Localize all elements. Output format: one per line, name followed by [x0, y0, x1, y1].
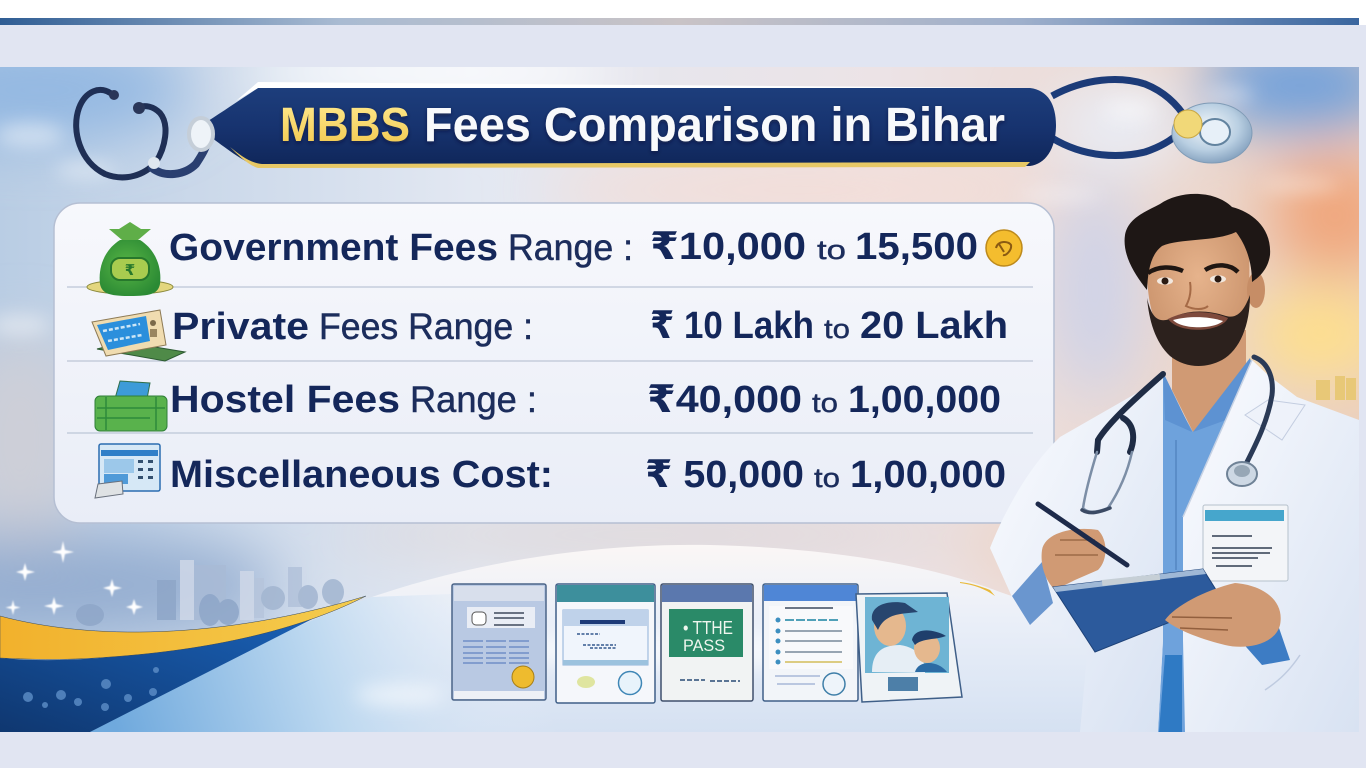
row: government fees: 15,500: [855, 226, 978, 268]
shirt collars: [1163, 372, 1192, 432]
card 3: pass: • TTHE: [683, 618, 733, 638]
blue swoosh: [0, 614, 322, 732]
panel: fee comparison table: [54, 203, 1054, 523]
icon: stethoscope ring: [189, 118, 213, 150]
card 5: photo id: [856, 593, 962, 702]
row: miscellaneous cost: ₹ 50,000: [645, 454, 804, 496]
document cards: [452, 584, 962, 703]
id badge: [1203, 505, 1288, 581]
icon: stethoscope, left: [76, 90, 206, 177]
blue shirt: [1158, 378, 1224, 732]
card 3: pass: [661, 584, 753, 701]
eyes and brows: [1148, 265, 1238, 309]
city skyline, left: [76, 560, 344, 626]
icon: calculator window: [95, 444, 160, 498]
hair: [1125, 194, 1270, 290]
title banner: [76, 80, 1252, 177]
gold swoosh right: [960, 582, 995, 596]
row: miscellaneous cost: [95, 444, 1006, 498]
card 3: pass: PASS: [683, 636, 725, 655]
row: private fees: to: [824, 314, 850, 344]
row: private fees: ₹ 10 Lakh: [650, 305, 814, 347]
icon: money bag: [87, 222, 173, 296]
neck: [1172, 330, 1246, 432]
icon: green suitcase: [95, 381, 167, 431]
row: hostel fees: Hostel Fees: [170, 379, 400, 421]
row: hostel fees: 1,00,000: [848, 379, 1001, 421]
row: government fees: to: [817, 235, 846, 265]
beard: [1147, 295, 1250, 366]
row: government fees: Government Fees: [169, 227, 498, 269]
banner shape: [208, 88, 1056, 167]
card 4: checklist: [763, 584, 858, 701]
row: government fees: Range :: [508, 227, 633, 268]
cuff: [1012, 562, 1053, 625]
row: miscellaneous cost: to: [814, 463, 840, 493]
gold swoosh left: [0, 596, 366, 659]
row: hostel fees: [95, 379, 1001, 431]
illustration: doctor: [990, 194, 1359, 732]
card 2: certificate: [556, 584, 655, 703]
stethoscope on shoulders: [1082, 357, 1272, 513]
left hand: [1042, 529, 1106, 590]
row: hostel fees: ₹40,000: [647, 379, 802, 421]
city skyline, right: [1316, 376, 1356, 400]
title text: Fees Comparison in Bihar: [424, 99, 1005, 152]
row: miscellaneous cost: Miscellaneous Cost:: [170, 454, 553, 496]
row: miscellaneous cost: 1,00,000: [850, 454, 1006, 496]
icon: stethoscope, right: [1052, 80, 1252, 163]
icon: money bag: ₹: [125, 262, 135, 279]
head: [1148, 232, 1250, 320]
title text: MBBS: [280, 99, 410, 152]
card 1: form: [452, 584, 546, 700]
stars: [6, 541, 143, 615]
right hand: [1165, 583, 1281, 647]
pen: [1038, 504, 1127, 565]
row: hostel fees: to: [812, 388, 838, 418]
row: private fees: [92, 305, 1008, 361]
lab coat: [990, 378, 1163, 732]
row: hostel fees: Range :: [410, 379, 537, 420]
top strip: [0, 18, 1359, 25]
clipboard: [1053, 569, 1223, 652]
row: private fees: Fees Range :: [319, 306, 533, 347]
row: private fees: 20 Lakh: [860, 305, 1008, 347]
icon: gold coin: [986, 230, 1022, 266]
row: government fees: ₹10,000: [650, 226, 806, 268]
icon: laptop: [92, 310, 185, 361]
white hill: [372, 545, 1163, 732]
row: private fees: Private: [172, 306, 309, 348]
row: government fees: [87, 222, 1022, 296]
